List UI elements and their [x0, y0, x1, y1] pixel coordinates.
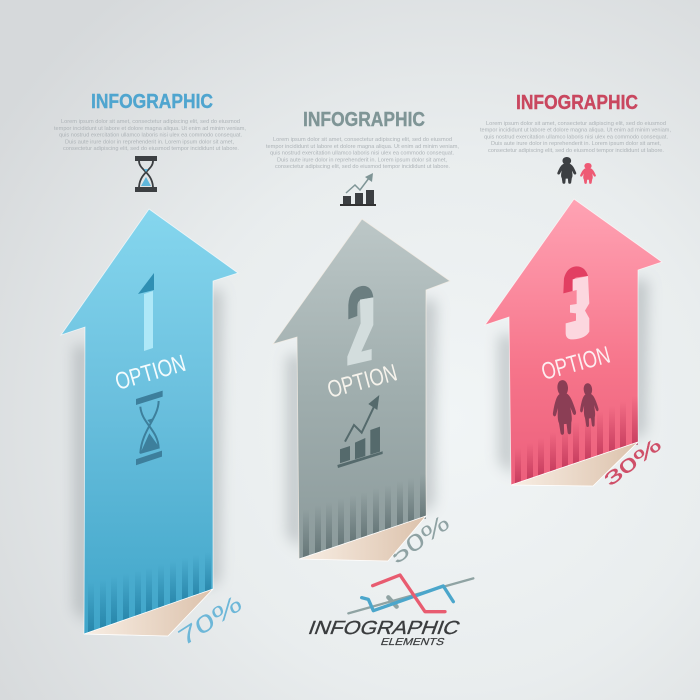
text block: column 1: [54, 119, 246, 152]
panel: column 1 header: [54, 90, 246, 192]
logo title: INFOGRAPHIC: [305, 618, 463, 639]
percent label 70%: 70%: [175, 590, 246, 652]
numeral 3: [563, 266, 589, 339]
logo: infographic elements: [305, 575, 473, 648]
text block: column 3: Lorem ipsum dolor sit amet, consectetur adipiscing elit, sed do eiusmod: [486, 121, 666, 127]
stripes: [303, 474, 426, 558]
icon: growth chart: [337, 395, 383, 468]
icon: growth chart: [340, 173, 376, 206]
page fold: [511, 442, 638, 486]
text block: column 1: tempor incididunt ut labore et dolore magna aliqua. Ut enim ad minim veniam,: [54, 126, 246, 132]
page fold: [299, 516, 426, 561]
text block: column 2: consectetur adipiscing elit, sed do eiusmod tempor incididunt ut labore.: [275, 164, 450, 170]
panel: arrow 1 blue: [61, 209, 246, 652]
heading: column 2: INFOGRAPHIC: [303, 108, 425, 131]
text block: column 2: quis nostrud exercitation ullamco laboris nisi ulex ea commodo consequat.: [270, 150, 454, 156]
icon: two people: [551, 379, 600, 435]
text block: column 3: quis nostrud exercitation ullamco laboris nisi ulex ea commodo consequat.: [484, 134, 668, 140]
text block: column 2: [266, 137, 459, 170]
text block: column 2: Duis aute irure dolor in reprehenderit in. Lorem ipsum dolor sit amet,: [277, 158, 447, 164]
text block: column 1: quis nostrud exercitation ullamco laboris nisi ulex ea commodo consequat.: [59, 132, 242, 138]
text block: column 2: Lorem ipsum dolor sit amet, consectetur adipiscing elit, sed do eiusmod: [273, 137, 452, 143]
text block: column 1: Lorem ipsum dolor sit amet, consectetur adipiscing elit, sed do eiusmod: [61, 119, 240, 125]
panel: column 3 header: [480, 91, 671, 184]
arrow shape: [61, 209, 238, 636]
text block: column 1: consectetur adipiscing elit, sed do eiusmod tempor incididunt ut labore.: [63, 146, 239, 152]
icon: two people: [557, 157, 596, 184]
heading: column 3: INFOGRAPHIC: [516, 91, 638, 114]
logo mark: [348, 575, 473, 613]
text block: column 1: Duis aute irure dolor in reprehenderit in. Lorem ipsum dolor sit amet,: [65, 140, 234, 146]
numeral 1: [138, 273, 154, 351]
option label: OPTION: [112, 350, 189, 396]
page fold: [84, 589, 213, 636]
icon: hourglass: [136, 391, 163, 465]
text block: column 3: Duis aute irure dolor in reprehenderit in. Lorem ipsum dolor sit amet,: [491, 141, 661, 147]
heading: column 1: INFOGRAPHIC: [91, 90, 213, 113]
text block: column 2: tempor incididunt ut labore et dolore magna aliqua. Ut enim ad minim veniam,: [266, 144, 459, 150]
panel: arrow 2 grey: [273, 219, 454, 570]
icon: hourglass: [135, 156, 157, 192]
numeral 2: [347, 286, 373, 366]
percent label 30%: 30%: [600, 434, 665, 490]
text block: column 3: tempor incididunt ut labore et dolore magna aliqua. Ut enim ad minim veniam,: [480, 128, 671, 134]
logo subtitle: ELEMENTS: [379, 637, 446, 648]
option label: OPTION: [539, 342, 613, 386]
panel: arrow 3 pink: [485, 199, 665, 490]
arrow shape: [485, 199, 662, 486]
option label: OPTION: [325, 359, 400, 404]
percent label 50%: 50%: [386, 510, 454, 570]
panel: column 2 header: [266, 108, 459, 206]
text block: column 3: consectetur adipiscing elit, sed do eiusmod tempor incididunt ut labore.: [488, 148, 664, 154]
text block: column 3: [480, 121, 671, 154]
arrow shape: [273, 219, 450, 561]
stripes: [515, 396, 638, 484]
stripes: [88, 552, 211, 633]
